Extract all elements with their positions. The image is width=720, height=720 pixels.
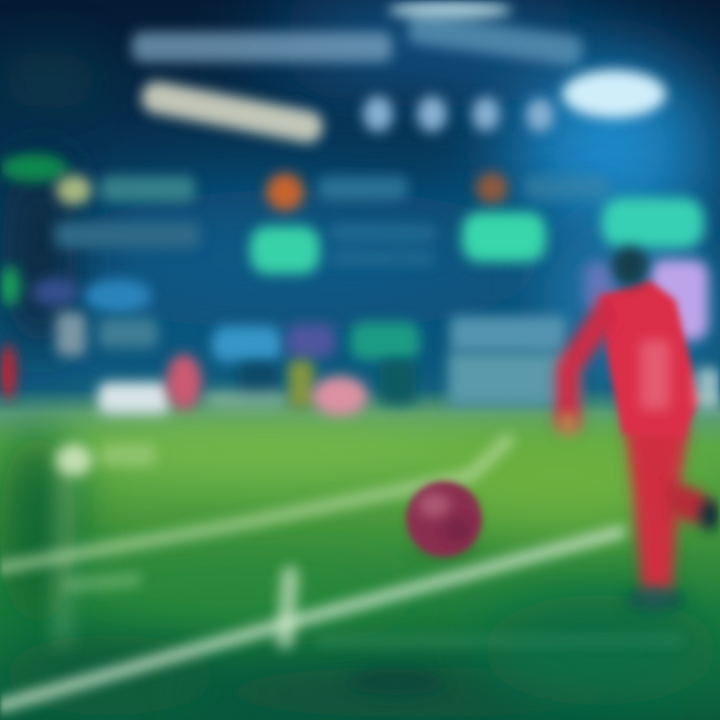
pale light left of player — [584, 262, 616, 312]
jersey number — [640, 340, 670, 410]
panel: right stat block — [462, 172, 704, 262]
boot — [700, 499, 720, 531]
pitch lines — [0, 440, 680, 706]
pale edge sign — [696, 368, 720, 408]
player legs — [625, 425, 690, 590]
pitch marker label — [56, 444, 156, 476]
panel: left stat block — [0, 154, 200, 248]
trailing boot — [639, 588, 671, 604]
football — [406, 481, 482, 560]
player arm — [556, 292, 618, 428]
player torso — [600, 280, 700, 438]
player shadow — [625, 588, 685, 612]
lower left block — [0, 266, 158, 356]
dark shadow on pitch — [348, 669, 444, 695]
row of round icons — [363, 96, 554, 132]
subheading — [139, 79, 326, 145]
bar figures at the horizon — [238, 360, 416, 416]
panel: centre stat block — [250, 173, 435, 274]
player in red kit — [556, 246, 720, 612]
player hand — [558, 412, 578, 436]
stadium floodlight — [562, 70, 666, 118]
purple light panel behind player — [650, 260, 708, 340]
player head — [612, 246, 648, 286]
heading — [132, 13, 584, 67]
coloured tags row — [212, 316, 578, 406]
top light — [388, 1, 512, 19]
horizon signage left — [0, 344, 285, 414]
